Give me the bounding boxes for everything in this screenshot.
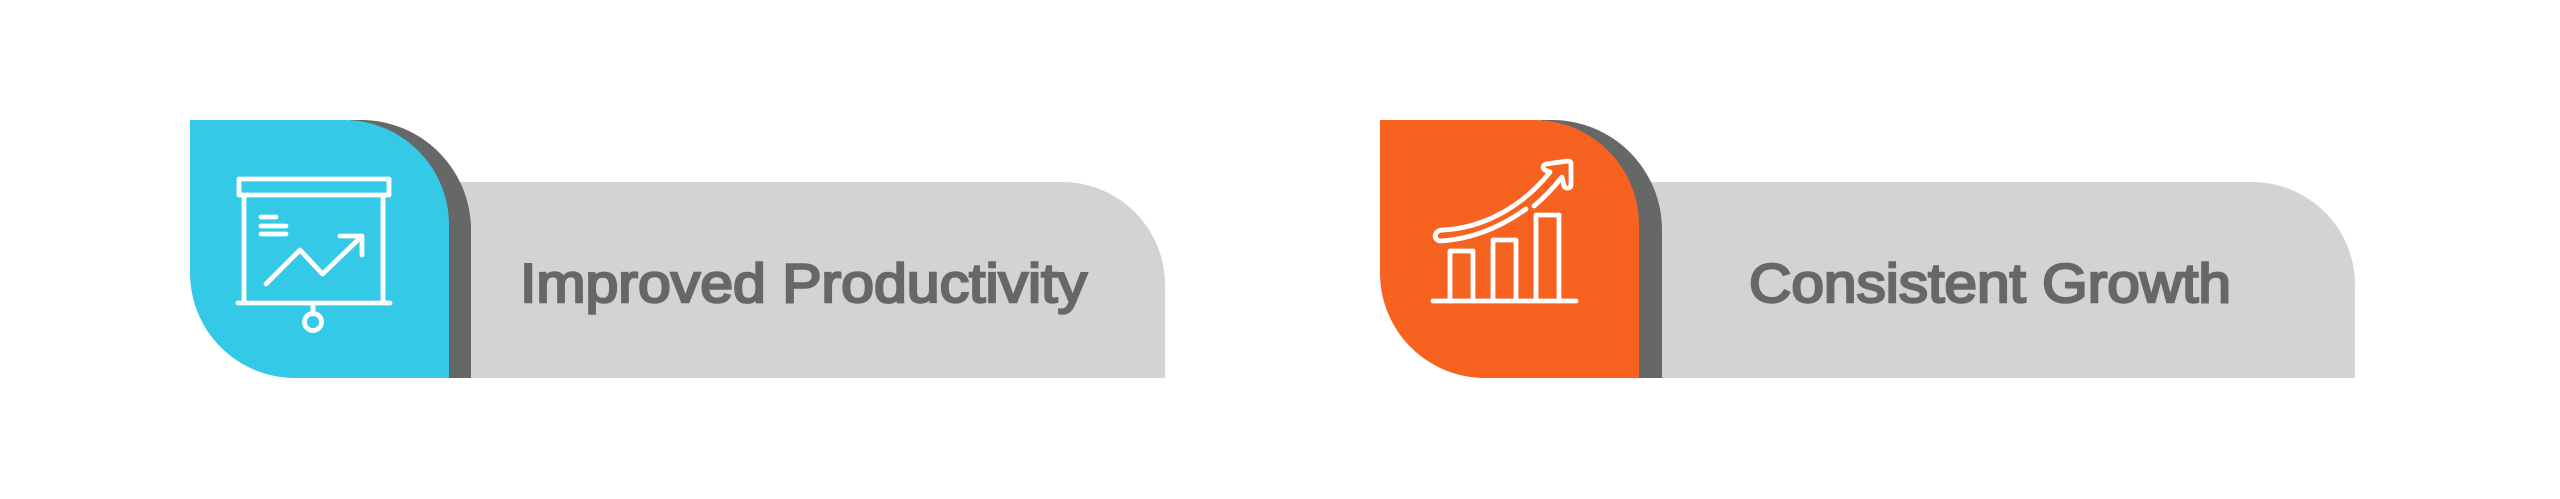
panel: improved productivity <box>190 120 1165 378</box>
icon: projector screen with rising chart <box>238 179 390 330</box>
panel: consistent growth <box>1380 120 2355 378</box>
label: improved productivity: Improved Productivity <box>520 252 1088 314</box>
blue icon tab <box>190 120 449 378</box>
label: consistent growth: Consistent Growth <box>1749 252 2231 314</box>
dark shadow tab <box>1500 120 1662 378</box>
dark shadow tab <box>310 120 471 378</box>
grey label bar <box>440 182 1165 378</box>
icon: bar chart with rising arrow <box>1433 161 1576 301</box>
grey label bar <box>1630 182 2355 378</box>
orange icon tab <box>1380 120 1639 378</box>
